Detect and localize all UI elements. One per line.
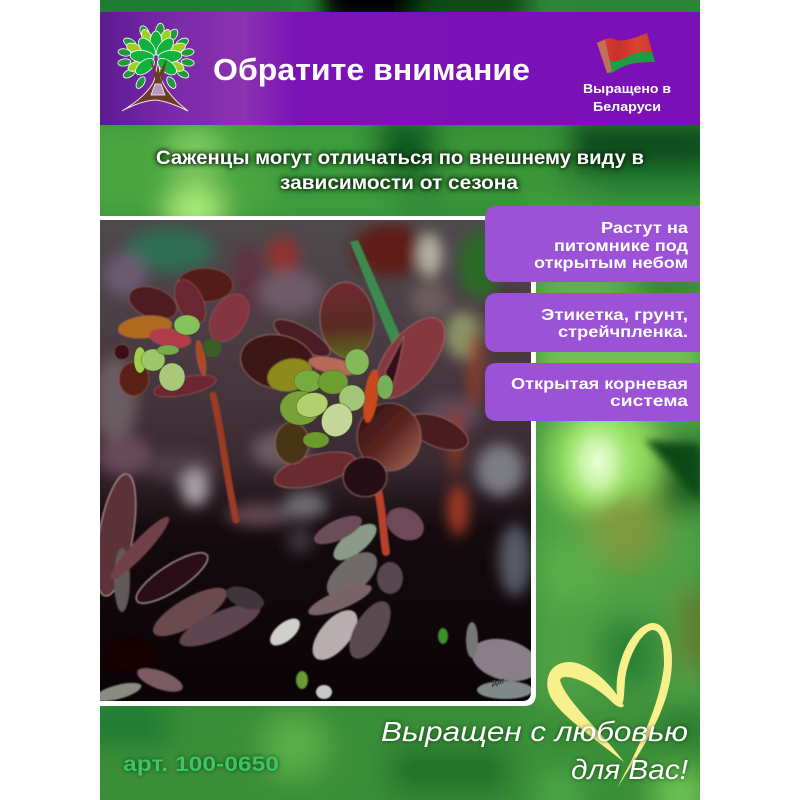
subtitle note: зависимости от сезона	[280, 172, 518, 194]
purple header band	[100, 12, 700, 125]
panel: packaging	[485, 293, 700, 352]
article number: арт. 100-0650	[123, 753, 279, 776]
icon: Belarus flag	[597, 33, 655, 73]
subtitle note: Саженцы могут отличаться по внешнему виду в	[156, 147, 644, 169]
photo: blurred background foliage	[93, 224, 531, 596]
photo: left plant leaves	[114, 268, 257, 401]
plant photo	[88, 220, 543, 705]
icon: yellow heart	[547, 623, 672, 788]
panel: grown in nursery	[485, 206, 700, 282]
title: Обратите внимание	[213, 52, 530, 87]
panel: root system: Открытая корневая	[511, 376, 688, 393]
photo: left plant buds	[134, 315, 221, 391]
label: grown in Belarus: Выращено в	[583, 81, 671, 96]
panel: root system: система	[610, 393, 688, 410]
panel: packaging: Этикетка, грунт,	[541, 307, 688, 324]
photo: lower dark foliage	[88, 471, 543, 705]
slogan	[381, 716, 688, 785]
photo: main plant buds	[280, 349, 393, 448]
photo: stems	[213, 395, 386, 552]
subtitle note	[156, 147, 644, 194]
panel: packaging: стрейчпленка.	[558, 324, 688, 341]
panel: grown in nursery: открытым небом	[534, 255, 688, 272]
photo frame	[100, 216, 536, 706]
panel: root system	[485, 363, 700, 421]
green bokeh background	[80, 0, 720, 800]
photo: main plant leaves	[235, 280, 473, 497]
panel: grown in nursery: Растут на	[601, 220, 688, 237]
label: grown in Belarus	[583, 81, 671, 114]
label: grown in Belarus: Беларуси	[593, 99, 661, 114]
photo: grass blade	[350, 240, 400, 345]
slogan: для Вас!	[571, 754, 688, 785]
panel: grown in nursery: питомнике под	[554, 238, 688, 255]
slogan: Выращен с любовью	[381, 716, 688, 747]
photo: watermark: Даг	[490, 676, 506, 688]
logo: tree	[117, 23, 195, 111]
